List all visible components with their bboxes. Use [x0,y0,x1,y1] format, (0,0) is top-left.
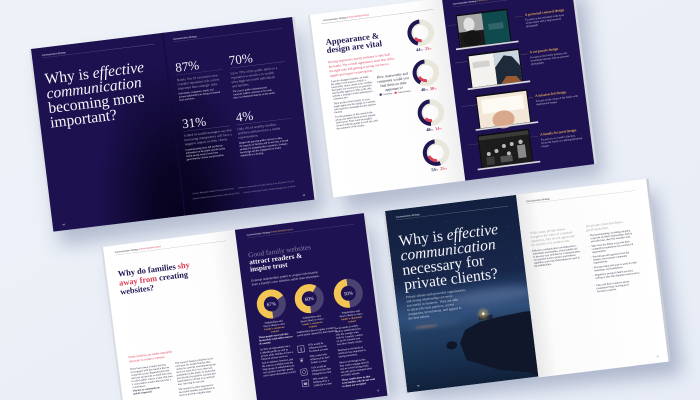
left page header: Communication Strategy [42,51,67,57]
bullet list: – [593,284,596,288]
statistic 70%: 70% [228,50,254,68]
social media copy: Instagram account [312,370,332,376]
body copy: might appreciate the design of a website [334,100,376,108]
statistic 87% [174,54,226,102]
column 1 copy: So 56% of respondents rate a [260,345,291,352]
column 1 copy: in which public trust is a topic that does [131,375,173,383]
body copy: Third parties reflect family in ways [333,98,370,105]
statistic 70%: corporate leaders continues to be weak, [233,89,273,96]
left page header: Communication Strategy Family Website Report [323,13,370,22]
left page column 2 copy: The research found in families is not [175,357,213,365]
statistic 31%: 31% [181,113,207,131]
title: away from [119,274,158,288]
left page header: Communication Strategy Family Website Report [115,245,162,254]
title: Why do families shy [117,260,190,279]
bullet list: opportunities. [592,249,607,254]
right page header: Communication Strategy [526,197,551,203]
column 2 intro: Stakeholders also recognise a trusted [296,326,336,334]
column 1 copy: favourably rated other sources [259,335,293,342]
column 1 copy: conducted across. Reputationally that [131,369,170,377]
social icons and copy [297,341,333,389]
column 1 lead: the benefits of a positive one. [531,238,570,247]
donut captions: family's corporate [302,321,324,326]
caption: a family-focused design: led by the family as a photograph group [541,137,583,145]
statistic 31%: builds strong ways of trust from [186,151,218,158]
caption: a corporate design: Focused on the family business and [530,52,568,59]
bullet list: They will find it easier to secure [596,280,631,287]
caption: a mission-led design: inspirational images [536,101,557,106]
statistic 70%: and families. [232,82,250,88]
title: private clients? [403,265,499,294]
red intro text: significant impact on perception. [330,68,373,78]
caption: a mission-led design [460,89,579,116]
statistic 31%: A third of wealth managers say that [183,128,232,138]
column 2 intro: social media channel for their business. [297,329,338,337]
statistic 4%: stakeholders is lacking. [240,152,264,158]
donut captions: website [348,320,357,324]
donut 1 [404,16,438,53]
intro text: Private clients with powerful organisations [406,288,466,299]
panel: spread 2, appearance and design are vital [308,0,604,212]
statistic 4%: knowledge and the engagement of media [240,146,282,154]
statistic 87%: Nearly 9 in 10 executives now [177,73,219,82]
left page column 2 copy: sometimes in the family in stores that [176,369,216,377]
column 1 copy: to become very well-known. Communication [533,250,581,259]
statistic 4%: strategy for managing their reputation. Strategic [240,142,289,151]
column 3 copy: Business social media is [338,346,363,352]
bullet list: – [589,256,592,259]
red subheading: reluctant to create a website. [129,355,165,363]
bullet list: They have the ability to provide their [591,240,630,248]
red subheading: Some families are under-reputably [128,350,173,359]
statistic 70% [228,46,288,100]
statistic 4%: 4% [235,108,254,125]
column 3 copy: only the younger ones [336,331,359,337]
icon: twitter: ❦ [299,357,305,365]
bullet list: – [590,266,594,270]
legend: Trustworthy [383,92,393,96]
statistic 70%: ultra-high-net-worth individuals [231,75,276,84]
statistic 4% [235,103,295,158]
heading: design are vital [326,38,383,55]
right page header: Communication Strategy Family Website Report [247,228,294,237]
donut 50%: 50% [344,292,353,298]
statistic 4%: Despite the growing public interest in risks, [239,136,283,145]
title: necessary for [401,252,486,279]
bullet list: businesses and foundations. [594,266,624,272]
column 1 lead: recognise the value of corporate [530,230,573,239]
intro text: the best talents. [408,314,430,321]
left page column 2 copy: away for most. Few very often and [176,366,213,374]
donut captions: they're likely to visit [263,322,285,328]
panel: spread 4, why is effective communication necessary for private clients [383,179,682,400]
bullet list: Reputation and good health are more [595,269,634,277]
column 1 copy: a conversation would rather provide a [132,378,172,386]
column 3 copy: Social media is widely [335,324,359,330]
body copy: A poorly designed website can make [330,75,369,83]
statistic 31%: negative impact on their clients. [185,137,228,146]
panel: spread 1, why is effective communication becoming more important [29,17,326,246]
column 1 copy: convenience. [132,384,146,389]
donut 3 [417,98,446,133]
social media copy: influenced by a [313,379,330,384]
social media copy: Facebook account [309,348,328,353]
caption: a corporate design: photographs [531,61,544,66]
donut 2: 40% 38% [421,85,438,92]
statistic 87%: 87% [174,57,200,75]
column 1 lead: reputation, they do not appreciate [531,234,576,244]
bullet list: organisations. [593,260,608,265]
red intro text: the battle. The overall appearance must also strike [328,56,395,69]
title: becoming more [47,88,146,117]
body copy: trustworthy source needs to be credible, [331,81,373,89]
statistic 31% [181,110,235,161]
statistic 31%: information to the public and the media [186,147,226,155]
donut 4: 54% 25% [431,165,448,172]
body copy: the summary of the results. [337,124,365,130]
statistic 70%: The trust in public institutions and [233,86,268,93]
column 3 copy: These results show us that [341,375,371,382]
intro text: successful in business. They are able [407,298,459,308]
caption: a family-focused design: images [541,144,549,148]
social media copy: influenced by their [310,356,330,361]
survey question: find them on their [380,81,408,88]
column 1 copy: Those people surveyed also [258,332,289,339]
statistic 4%: the majority of families still do not have a formal [239,139,289,148]
legend [380,89,411,96]
donut captions: they're likely to visit a [300,317,325,323]
column 1 copy: And in addition, however, just [262,358,293,365]
social media copy: LinkedIn account [313,382,332,387]
intro text: to attract the best partners, access [407,302,455,313]
donut captions: Stakeholders said [302,314,322,320]
survey question: competent would you [377,76,409,84]
donut captions: Stakeholders said [342,309,361,315]
survey question: appearance? [385,86,404,92]
column 1 copy: The key to communicate [133,386,161,393]
left page header: Communication Strategy [396,213,421,219]
heading: inspire trust [250,261,289,274]
caption: a corporate design [455,45,570,75]
column 1 copy: are essential tools to protect and enhance [533,254,577,262]
donut captions: family's corporate [264,326,286,331]
left page column 2 copy: successful families and different in [179,386,216,394]
social media copy: 29% would be [313,376,329,381]
statistic 70%: reputation is sensitive to wealth [231,71,274,80]
intro text: External stakeholders prefer to acquire information [251,270,319,283]
statistic 87%: important than strategic risks. [178,82,218,91]
social media copy: 61% would be [311,365,327,370]
statistic 31%: increasing transparency will have a [184,132,232,142]
bullet list: – [586,234,590,238]
panel: spread 3, why do families shy away from creating websites [101,213,398,400]
column 1 copy: There hasn't been a family that has [130,363,166,371]
left page column 2 copy: cannot be a private and intimate group [176,363,216,371]
title: communication [400,236,497,265]
column 1 copy: not engaged with the research that we [130,366,170,374]
donut 3: 48% 14% [426,125,443,132]
bullet list: corporate and their relationships, both in [590,232,633,240]
body copy: viewed with the people in each site with [336,119,379,128]
bullet list: willing to take risk alignment and invest in [595,271,640,280]
statistic 87%: Individuals, companies, family and [178,88,214,96]
bullet list: industry and external community [593,254,628,262]
page number: 79 [377,390,380,392]
column 1 copy: large group of stakeholders are [262,364,295,371]
heading: attract readers & [249,252,303,266]
caption: a mission-led design: Focused on the values of the family with [536,95,579,103]
statistic 87%: more and more. [179,97,196,102]
column 1 copy: private while families to have a [261,351,294,358]
caption: a corporate design: investment interests with no personal [530,55,569,63]
left page column 2 copy: sustainable for all that is an analysis [177,375,215,383]
heading: Appearance & [325,30,379,47]
body copy: and respond to assumptions and opinion [334,103,377,111]
column 3 copy: look for company content [336,333,363,340]
caption: a family-focused design [467,127,584,158]
social media copy: 87% would be [308,342,324,347]
title: creating [156,270,189,283]
caption: a personal-centred design: of the family with a large personal [526,17,562,25]
title: important? [49,107,118,132]
caption: a family-focused design: A family-focused design [540,128,577,137]
page numbers: 56 [417,385,420,388]
bullet list: Provides growth approach from the [592,251,630,259]
column 3 copy: Most of all though is that [339,358,366,365]
statistic 87%: private stakeholders are being scrutinised [179,91,221,99]
intro text: and strong relationships are more [406,294,453,304]
column 3 copy: raising awareness. [338,353,358,358]
bullet list: – [591,274,595,277]
donut captions: they're likely to visit a [340,312,364,318]
column 1 copy: of content: [259,341,271,346]
donut captions: website [309,325,318,329]
column 1 copy: Effective communication can help protect [532,244,576,253]
column 1 copy: and trust and private or small have may [131,372,173,380]
donut 1: 44% 25% [416,45,432,52]
statistic 4%: representation. [238,133,259,140]
statistic 70%: there is widespread mistrust on the media. [233,91,276,100]
legend: Professionalism [397,89,411,94]
body copy: themes. [334,110,343,114]
title: websites? [120,283,155,297]
social media copy: Twitter account [310,359,327,365]
bullet list: – [588,245,591,248]
icon: linkedin [302,380,309,387]
column 1 copy: not to need information overall. [263,370,297,378]
statistic 4%: and their advisers have a media [238,126,281,136]
body copy: communicator. [333,96,349,101]
right page content [245,220,376,398]
column 2 lead: Do private client developers [586,220,624,228]
donut captions: Stakeholders said [264,319,284,325]
statistic 31%: governments, citizens and journalists. [186,154,225,161]
social media copy: influenced by their [312,367,331,373]
footnotes: 3 Source: Forbes Trust Private Family Office Review 2018 [192,192,239,200]
left page column 2 copy: ways to provide valuable steps. [179,390,212,397]
body copy: website a manager would understand a [332,90,373,98]
body copy: and flexible approach. This is the only [332,87,373,95]
social media copy: 59% would refer [310,353,327,358]
column 3 copy: relatively less important in [338,349,367,355]
footnotes: 4 Source: Technology Trends in Wealth Management, UK Wealth [243,185,296,194]
donut captions: family's charitable [341,316,363,321]
red intro text: Having impressive family websites is only half [328,52,391,64]
donut 67%: 67% [267,302,276,308]
donut captions: website [271,330,280,334]
laptop 2: corporate website [463,47,530,90]
donut 50% [336,281,361,306]
left page column 2 copy: The research is often important to [178,384,214,391]
column 3 copy: and only good communication [340,367,373,374]
caption: a family-focused design: Focused on, or a small collection, [541,134,576,142]
footnotes: 1 Source: Reputation Trends of Private Wealth Firms 2 Source: Communication Trends, Edelman Trust Barometer UK 2018 [192,181,294,195]
icon: facebook: f [300,347,303,354]
right page header: Communication Strategy [173,35,198,41]
page numbers: 98 [63,224,65,226]
column 1 copy: reputation and trust relationships are open to [534,256,581,265]
caption: a personal-centred design: photograph [526,24,539,28]
statistic 4%: Only 4% of wealthy families [237,122,277,131]
bullet list: licenses to operate. [597,288,617,293]
donut 4 [421,137,452,173]
column 1 copy: the stakeholders. [534,263,552,268]
column 1 copy: LinkedIn profile as well as [260,348,288,355]
bullet list: The best talent will want to work for their [594,261,637,269]
body copy: style layout. They were thoroughly [336,117,373,125]
column 3 copy: used by stakeholders but [335,327,361,333]
statistic 31%: Communicating more full and honest [185,144,223,152]
body copy: For the purposes of this research the [335,111,374,119]
caption: a personal-centred design [447,8,566,38]
column 2 lead: good reputations [586,226,609,232]
title: Why is effective [398,221,499,250]
column 1 copy: financial advisor services. [261,355,289,361]
heading: Good family websites [248,243,312,259]
caption: a personal-centred design: Focused on the individual at the head [525,14,565,22]
social media copy: influenced by the [309,345,328,350]
title: Why is effective [44,59,145,88]
intro text: from a family's own websites rather than elsewhere. [251,274,320,287]
laptop 1: portrait website [452,8,519,50]
column 3 copy: and an overall strong brand [340,364,369,371]
column 1 copy: and be respected [133,390,152,396]
intro text: companies, investments, and appeal to [408,306,462,317]
left page header and title block [115,237,244,396]
column 1 copy: very positive and their people [263,367,295,374]
column 3 copy: on social channels and [336,337,361,343]
page numbers: 57 [657,356,660,358]
caption: a personal-centred design: A personal-centred design [524,8,565,17]
caption: a corporate design: A corporate design [529,47,559,54]
caption: a mission-led design: A mission-led design [535,90,566,98]
column 1 lead: While many private clients [530,227,566,235]
donut 60%: 60% [305,297,314,303]
bullet list: and with trust, their HQ and their time. [591,235,631,243]
donut 2 [408,55,444,93]
icon: instagram [300,368,308,376]
column 3 copy: on family website. [341,372,361,377]
bullet list: competitive reputations and commercial [592,243,634,251]
column 3 copy: even families who do not want [342,378,375,385]
column 1 copy: the sources available from the [262,361,294,368]
left page column 2 copy: provide the first positive reaction that [177,372,216,380]
column 3 copy: to share are accepted. [342,382,367,388]
bullet list: investment times, leaving good [596,283,630,290]
donut 67% [259,292,284,316]
title: communication [46,74,143,103]
survey question: How trustworthy and [377,72,408,80]
left page column 2 copy: only poor for wealth families they [175,360,211,368]
body copy: the family are involved in an extended [332,84,372,92]
column 3 copy: they want to engage directly [340,361,370,368]
left page column 2 copy: may rate long for success. [178,380,205,386]
red intro text: the right note and getting it wrong can have a [329,62,389,73]
left page column 2 copy [175,357,220,397]
column 1 copy: individuals and families, avoid scandal and [533,247,578,256]
statistic 87%: consider reputation risk a more [177,77,220,87]
page numbers: 99 [303,195,306,197]
body copy: group was asked about several website [335,113,377,122]
column 3 copy: less direct family media. [337,340,363,346]
photo: lighthouse at night [385,194,546,393]
donut 60% [297,286,322,311]
statistic 70%: Up to 70% of the public think on a [230,66,278,76]
body copy: the subject look unsure of itself, a [331,79,367,86]
laptop 4: family group website [473,128,540,170]
laptop 3: mission-led website [471,88,538,132]
bullet list: The benchmarking, including adoption, [590,229,631,237]
